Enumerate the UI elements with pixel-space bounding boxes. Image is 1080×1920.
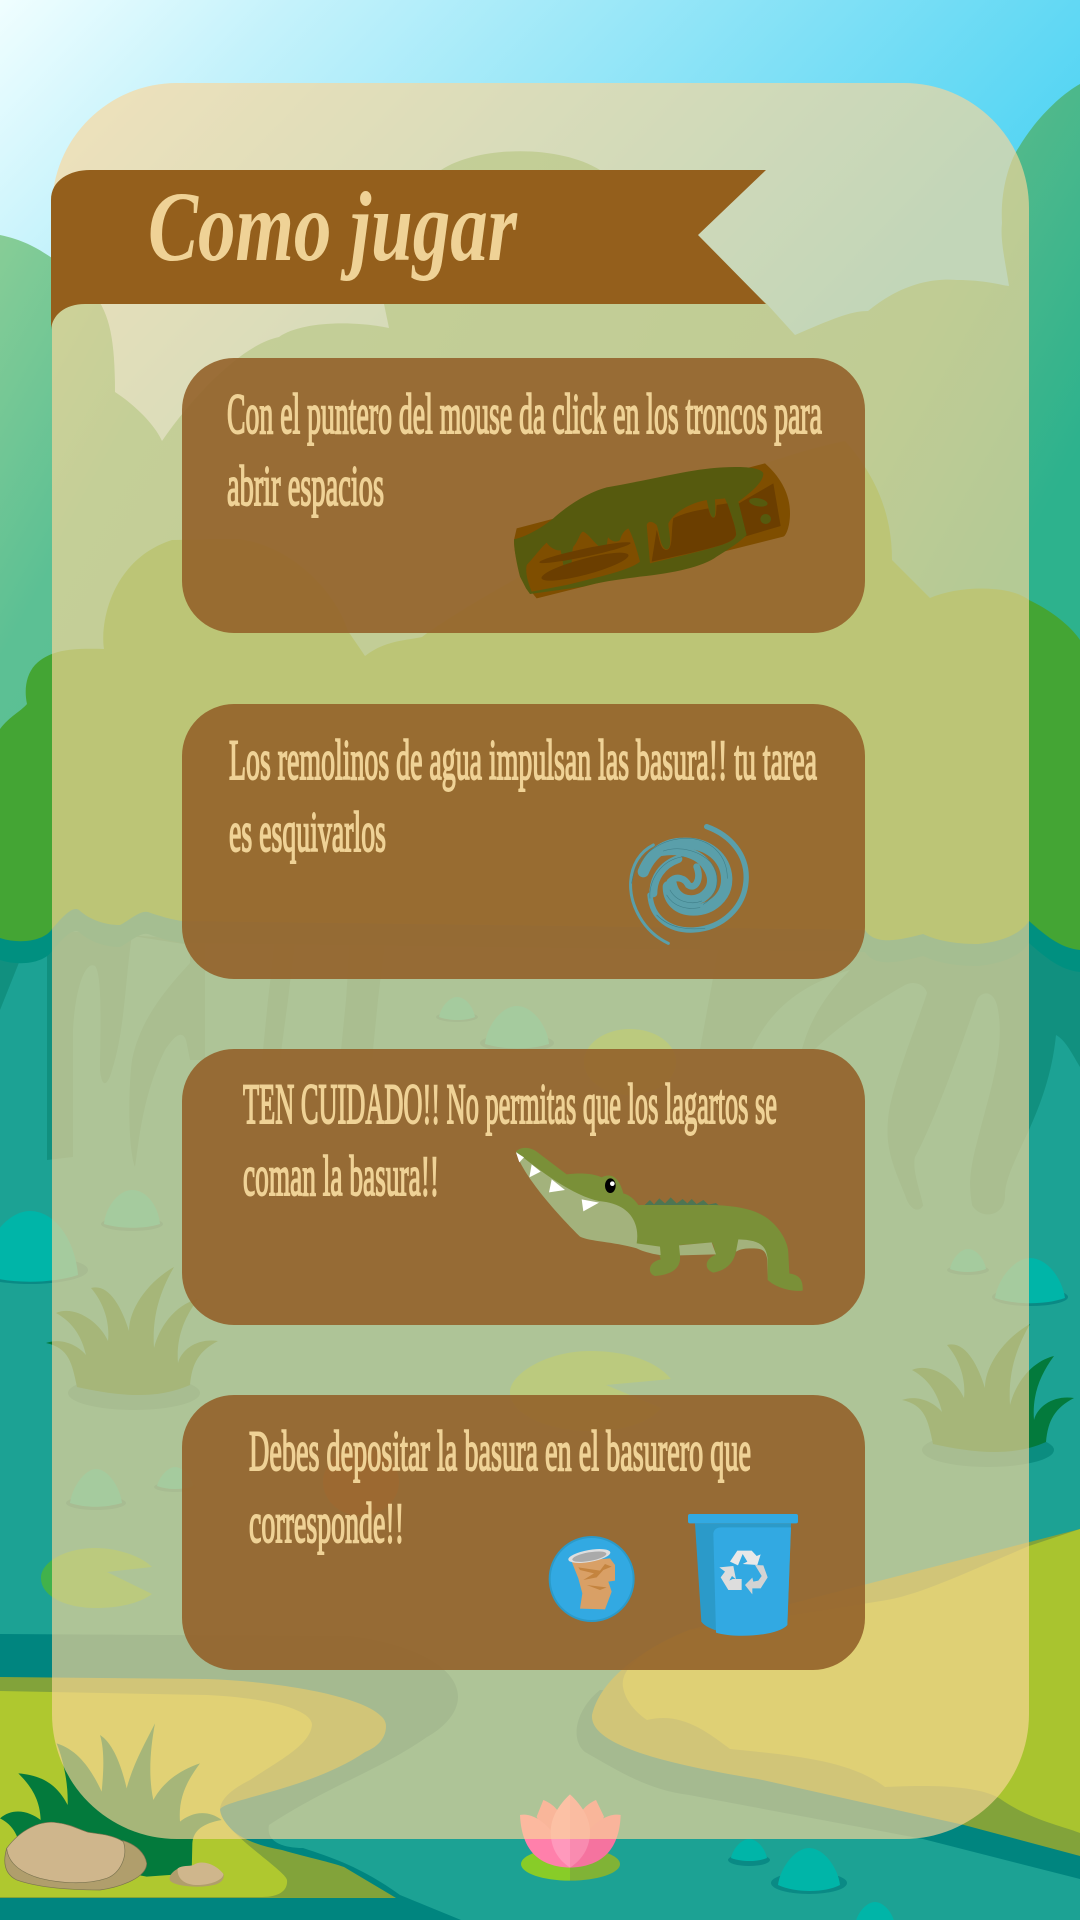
panel: card 2 whirlpool instruction — [182, 704, 865, 979]
card 2 text — [229, 729, 817, 864]
canopy front trees — [0, 441, 1080, 950]
water rocks — [0, 997, 1068, 1920]
card 4 text — [249, 1420, 751, 1555]
sky — [0, 0, 1080, 1000]
riverbank shadow right — [577, 1690, 1080, 1879]
riverbank olive left — [0, 1677, 396, 1898]
icon: alligator — [516, 1148, 803, 1291]
card 4 text: corresponde!! — [249, 1492, 404, 1555]
title: Como jugar — [148, 171, 518, 282]
card 1 text: abrir espacios — [227, 455, 384, 518]
back tree line — [0, 84, 1080, 780]
panel: card 3 alligator warning — [182, 1049, 865, 1325]
tree trunks — [0, 930, 1080, 1214]
grass clump left — [46, 1267, 218, 1410]
card 3 text — [243, 1073, 777, 1208]
large stone — [5, 1841, 147, 1890]
card 3 text: coman la basura!! — [243, 1145, 439, 1208]
card 2 text: es esquivarlos — [229, 801, 386, 864]
small stone — [170, 1868, 224, 1887]
icon: whirlpool — [631, 827, 746, 943]
riverbank shadow left — [0, 1634, 461, 1920]
icon: recycling bin — [688, 1514, 798, 1636]
heading ribbon — [51, 170, 766, 330]
panel: card 1 log instruction — [182, 358, 865, 633]
water — [0, 900, 1080, 1920]
riverbank light left — [0, 1691, 312, 1897]
faint stump — [323, 1448, 399, 1516]
icon: crushed cup in bubble — [550, 1537, 634, 1621]
lily pads — [41, 1029, 676, 1608]
card 1 text — [227, 383, 822, 518]
bottom left grass — [0, 1723, 224, 1890]
riverbank light right — [623, 1529, 1080, 1833]
lotus flower — [520, 1794, 621, 1881]
riverbank olive right — [592, 1529, 1080, 1856]
icon: slimy log — [514, 463, 790, 598]
grass clump right — [902, 1324, 1074, 1467]
panel: card 4 recycling instruction — [182, 1395, 865, 1670]
light gaps between trunks — [752, 970, 1000, 1205]
recycling symbol — [719, 1551, 768, 1594]
canopy shadow band — [0, 780, 1080, 972]
